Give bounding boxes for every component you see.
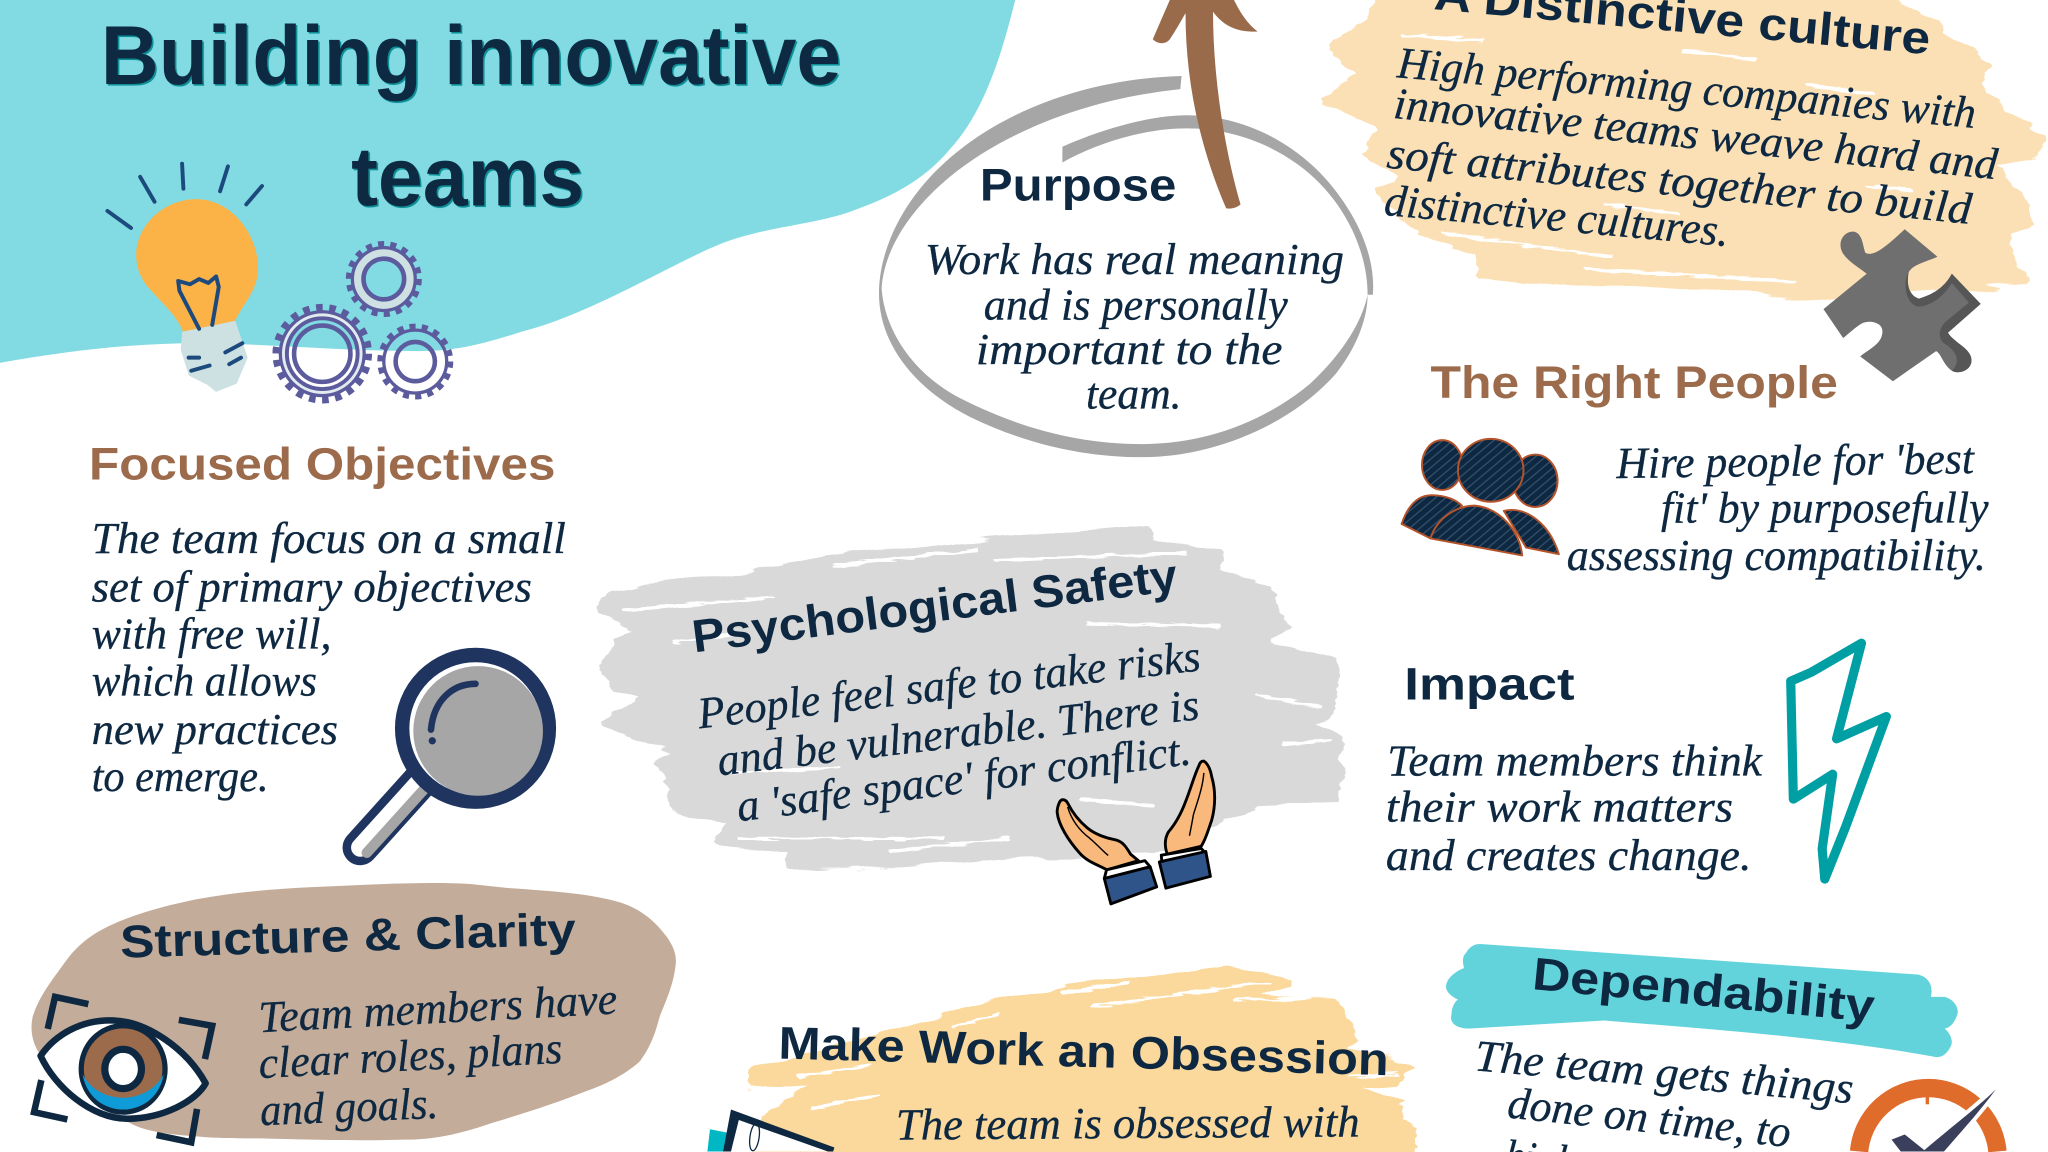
body text: People feel safe to take risks <box>694 630 1203 738</box>
icon: eye <box>34 997 212 1142</box>
heading: Purpose <box>980 159 1176 210</box>
panel: make work an obsession <box>707 967 1415 1152</box>
body text <box>925 234 1344 419</box>
body text: set of primary objectives <box>92 561 532 611</box>
icon: puzzle piece <box>1823 229 1981 381</box>
arrow <box>1153 0 1258 209</box>
body text <box>92 513 566 801</box>
title: teams <box>351 130 584 224</box>
body text: and is personally <box>984 280 1288 330</box>
body text <box>1567 433 1989 580</box>
body text <box>257 974 618 1135</box>
body text <box>1386 736 1763 880</box>
panel: impact <box>1386 643 1886 880</box>
icon: magnifying glass <box>360 655 549 853</box>
body text: Hire people for 'best <box>1615 433 1976 488</box>
teal brush banner <box>1446 944 1958 1057</box>
heading: Impact <box>1404 659 1575 710</box>
body text: Team members have <box>257 974 618 1042</box>
heading: Structure & Clarity <box>119 904 577 968</box>
body text: Work has real meaning <box>925 234 1344 284</box>
body text: clear roles, plans <box>257 1023 563 1088</box>
peach brush background <box>749 967 1415 1152</box>
panel: focused objectives <box>89 438 566 853</box>
icon: clipboard <box>707 1110 834 1151</box>
body text: team. <box>1086 369 1182 419</box>
body text: and creates change. <box>1386 830 1751 880</box>
body text <box>1382 37 2001 256</box>
body text: and goals. <box>259 1078 439 1135</box>
body text: new practices <box>92 704 338 754</box>
body text: their work matters <box>1386 781 1733 831</box>
body text: fit' by purposefully <box>1661 483 1989 533</box>
icon: lightning bolt <box>1791 643 1886 879</box>
body text: assessing compatibility. <box>1567 530 1986 580</box>
brush circle <box>879 76 1373 457</box>
body text: to emerge. <box>92 751 269 801</box>
panel: a distinctive culture <box>1324 0 2044 381</box>
body text: Team members think <box>1387 736 1763 786</box>
panel: psychological safety <box>603 528 1339 904</box>
heading: Psychological Safety <box>689 550 1181 662</box>
body text: The team gets things <box>1473 1030 1856 1113</box>
icon: gears <box>276 245 449 400</box>
title <box>101 8 841 224</box>
icon: clock with check <box>1859 1088 1997 1151</box>
body text <box>1473 1030 1856 1152</box>
body text: which allows <box>92 656 317 706</box>
heading: Make Work an Obsession <box>778 1017 1389 1085</box>
body text: a 'safe space' for conflict. <box>734 724 1194 831</box>
peach brush background <box>1324 0 2044 296</box>
title: Building innovative <box>101 8 841 102</box>
heading: Dependability <box>1530 948 1877 1032</box>
icon: light bulb <box>107 164 262 390</box>
body text: and be vulnerable. There is <box>715 679 1202 785</box>
body text: innovative teams weave hard and <box>1391 78 2001 189</box>
body text: soft attributes together to build <box>1385 128 1975 234</box>
teal header blob <box>0 0 1015 363</box>
body text: with free will, <box>92 608 331 658</box>
body text <box>694 630 1203 831</box>
body text: The team focus on a small <box>92 513 566 563</box>
body text: important to the <box>976 324 1282 374</box>
heading: Focused Objectives <box>89 438 555 489</box>
panel: structure and clarity <box>32 883 676 1142</box>
grey brush background <box>603 528 1339 869</box>
panel: purpose <box>879 0 1373 457</box>
body text: distinctive cultures. <box>1382 175 1731 256</box>
body text: High performing companies with <box>1395 37 1978 138</box>
body text: The team is obsessed with <box>896 1096 1360 1150</box>
panel: the right people <box>1402 357 1989 580</box>
icon: open hands <box>1057 761 1215 904</box>
icon: people group <box>1402 439 1559 555</box>
heading: The Right People <box>1430 357 1838 408</box>
panel: title area <box>0 0 1015 400</box>
panel: dependability <box>1446 944 1997 1152</box>
tan blob <box>32 883 676 1140</box>
